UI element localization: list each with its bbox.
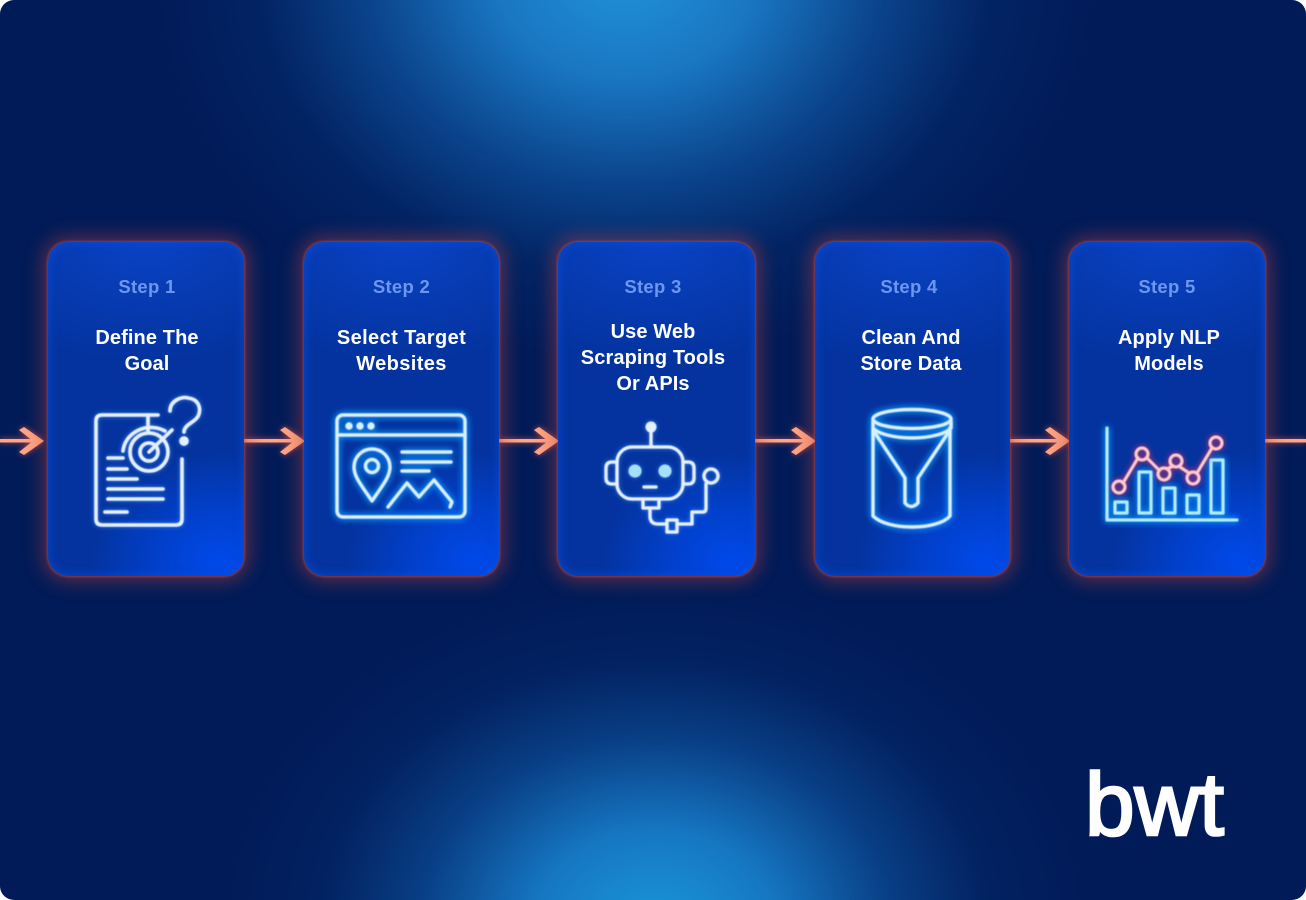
heading: clean and store data: Store Data xyxy=(860,353,962,375)
heading: clean and store data xyxy=(860,327,962,375)
panel: step 3 xyxy=(558,242,755,576)
panel: step 4 xyxy=(815,242,1010,576)
trend line xyxy=(1113,437,1222,493)
bars and axes xyxy=(1107,428,1237,520)
icon: robot xyxy=(602,419,722,536)
icon: document with target and question mark xyxy=(92,393,204,530)
heading: select target websites: Websites xyxy=(356,353,447,375)
heading: clean and store data: Clean And xyxy=(861,327,961,349)
heading: use web scraping tools or apis: Use Web xyxy=(611,321,695,343)
heading: apply nlp models: Apply NLP xyxy=(1118,327,1220,349)
panel: step 2 xyxy=(304,242,499,576)
heading: define the goal: Goal xyxy=(125,353,169,375)
step label 4: Step 4 xyxy=(880,276,938,297)
icon: browser window with map pin xyxy=(330,408,472,524)
panel: step 5 xyxy=(1069,242,1265,576)
heading: use web scraping tools or apis: Scraping Tools xyxy=(581,347,725,369)
icon: bar and line chart xyxy=(1100,423,1242,527)
heading: define the goal xyxy=(95,327,199,375)
step label 3: Step 3 xyxy=(624,276,682,297)
heading: define the goal: Define The xyxy=(95,327,199,349)
panel: step 1 xyxy=(48,242,244,576)
heading: apply nlp models: Models xyxy=(1134,353,1204,375)
heading: select target websites xyxy=(337,327,466,375)
heading: use web scraping tools or apis xyxy=(581,321,725,395)
heading: select target websites: Select Target xyxy=(337,327,466,349)
heading: apply nlp models xyxy=(1118,327,1220,375)
heading: use web scraping tools or apis: Or APIs xyxy=(616,373,690,395)
step label 1: Step 1 xyxy=(118,276,176,297)
icon: funnel in cylinder xyxy=(866,402,958,534)
step label 2: Step 2 xyxy=(373,276,430,297)
step label 5: Step 5 xyxy=(1138,276,1196,297)
